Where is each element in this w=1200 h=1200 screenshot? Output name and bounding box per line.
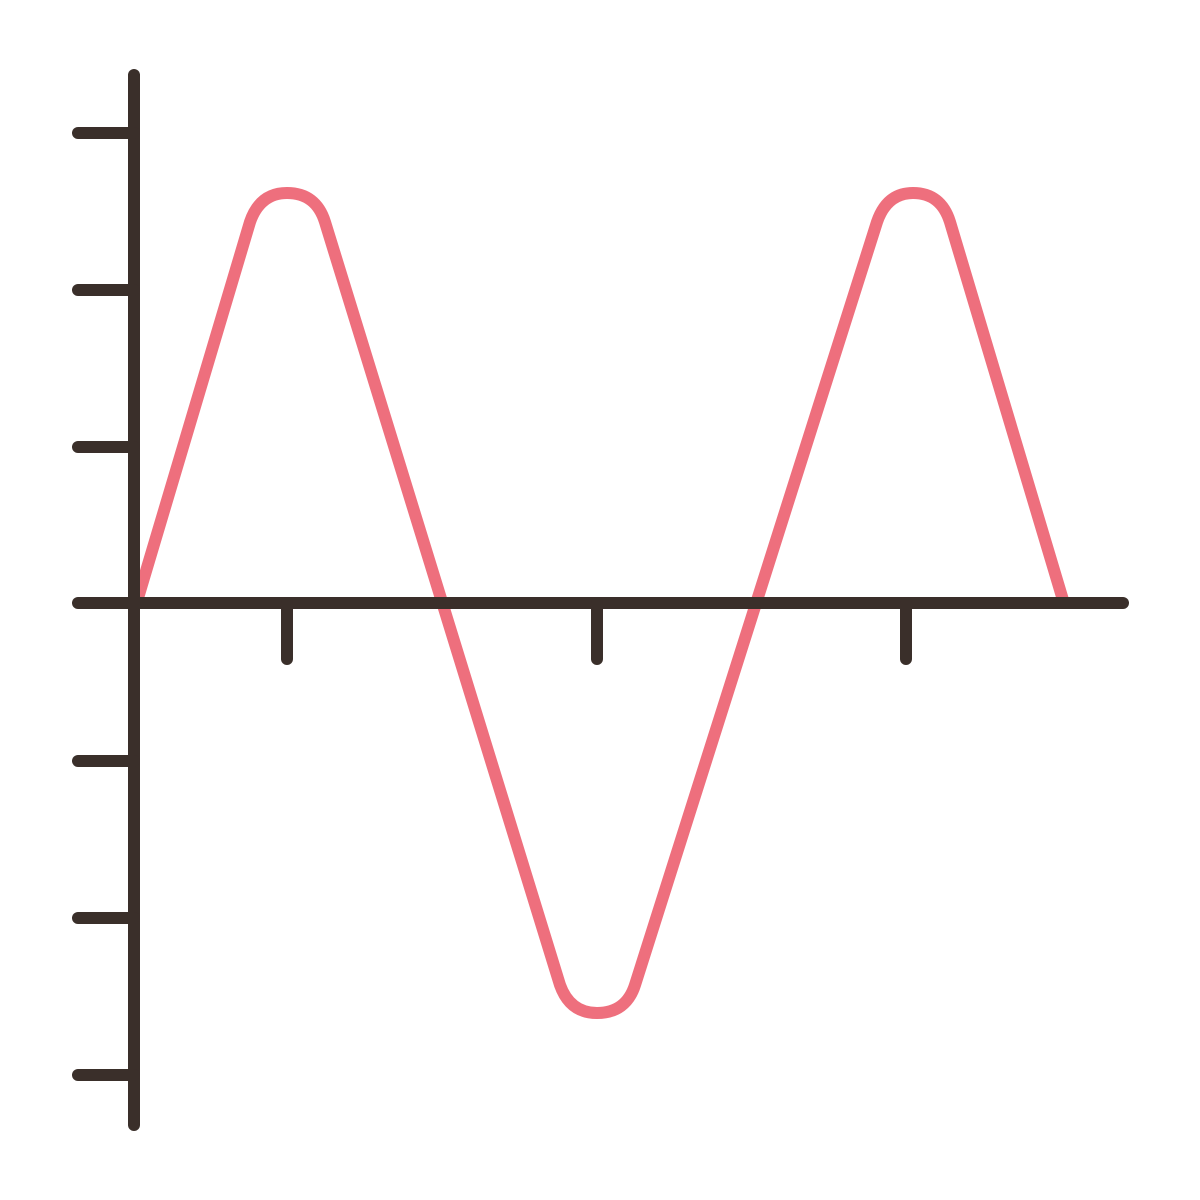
wave line	[138, 193, 1063, 1013]
axes	[78, 75, 1123, 1125]
